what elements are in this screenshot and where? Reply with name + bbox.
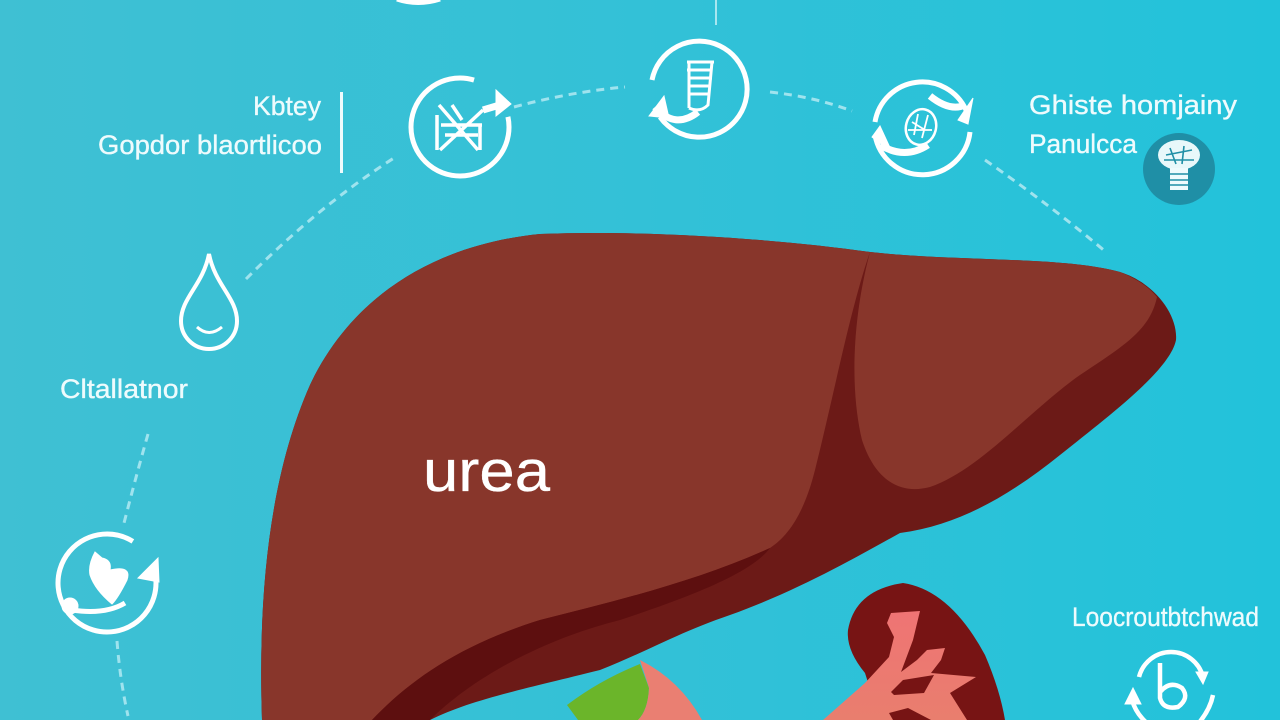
top partial ring [397,0,440,2]
kidney [823,583,1005,720]
kidney calyx dark spots [891,675,934,695]
liver [261,233,1176,720]
pink duct [638,660,702,720]
top vertical line [715,0,717,25]
label: left top [98,91,322,160]
label: left middle: Cltallatnor [60,374,188,404]
dashed connectors [117,87,1106,716]
kidney pelvis [823,611,976,720]
label: right top: Panulcca [1029,129,1138,159]
urea label: urea [423,439,551,504]
icon: water drop [181,254,237,349]
icon: bottom right ring [1125,652,1213,720]
label: right top [1029,90,1238,159]
icon: organ ring [872,82,973,175]
label: right bottom: Loocroutbtchwad [1072,602,1259,632]
icon: intestine ring [649,41,747,137]
liver left lobe [261,233,870,720]
kidney body [848,583,1005,720]
icon: stomach ring [54,530,160,636]
liver right lobe [854,252,1157,489]
label: left top: Kbtey [253,91,321,121]
icon: brain badge [1143,133,1215,205]
label: right top: Ghiste homjainy [1029,90,1238,120]
liver lower dark crease [372,548,770,720]
icon: nerve ring [402,69,518,185]
divider next to left label [340,92,343,173]
green gallbladder [567,664,649,720]
liver dark under-body [261,233,1176,720]
label: left top: Gopdor blaortlicoo [98,130,322,160]
